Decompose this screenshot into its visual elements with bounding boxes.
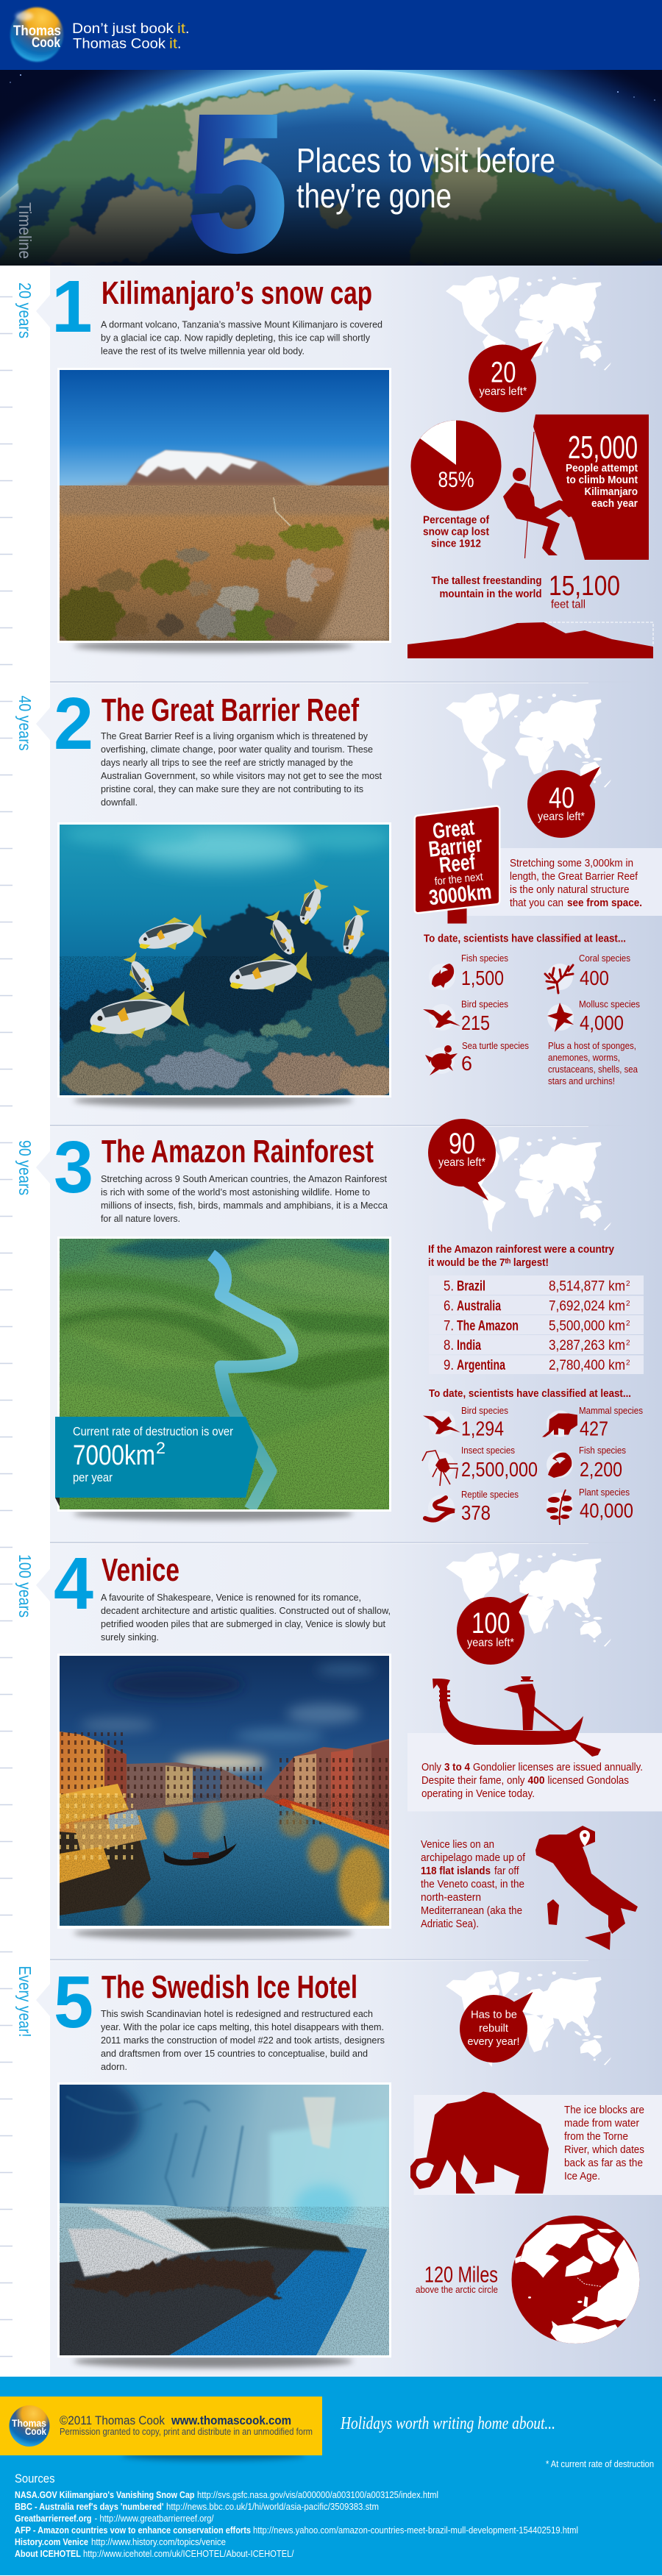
country size comparison table: it would be the 7ᵗʰ largest! [428, 1257, 549, 1269]
plant count [547, 1487, 633, 1525]
sources: NASA.GOV Kilimangiaro's Vanishing Snow Cap [15, 2490, 195, 2500]
tagline: it [169, 35, 178, 51]
callout band: gondolier licenses: licensed Gondolas [547, 1774, 629, 1787]
callout: rate of destruction: 7000km [73, 1440, 155, 1471]
copyright bar [0, 2397, 322, 2455]
body text [101, 730, 382, 808]
heading: The Great Barrier Reef [102, 692, 359, 728]
pie chart: 85%: Percentage of [423, 515, 489, 527]
callout band: mammoth: from the Torne [564, 2130, 628, 2143]
heading: Venice [102, 1552, 179, 1588]
callout band: mammoth: The ice blocks are [564, 2104, 644, 2116]
species counts: rainforest: To date, scientists have classified at least... [429, 1387, 631, 1400]
body text: for all nature lovers. [101, 1213, 180, 1224]
heading: Kilimanjaro’s snow cap [102, 275, 372, 311]
reptile count: 378 [461, 1501, 491, 1524]
big number five: 5 [188, 74, 288, 291]
reflections [122, 1801, 405, 1932]
insect count: Insect species [461, 1445, 515, 1456]
climber stat: Kilimanjaro [584, 486, 638, 498]
map with 20 years left bubble [446, 275, 611, 412]
species counts: reef [423, 933, 640, 1086]
road sign: Great Barrier Reef: Barrier [427, 832, 483, 862]
road sign: Great Barrier Reef: Reef [438, 850, 477, 878]
pie chart: 85% [410, 421, 502, 550]
body text: A favourite of Shakespeare, Venice is renowned for its romance, [101, 1592, 361, 1603]
height stat and mountain silhouette: 15,100 [549, 571, 620, 602]
height stat and mountain silhouette: mountain in the world [440, 588, 541, 600]
mammal count: 427 [580, 1417, 608, 1440]
callout band: mammoth: back as far as the [564, 2157, 643, 2169]
bird count: 215 [461, 1011, 490, 1034]
callout: rate of destruction: 2 [156, 1439, 166, 1457]
reptile count [425, 1489, 519, 1524]
map with rebuilt bubble [446, 1970, 611, 2067]
species counts: reef: To date, scientists have classified at least... [424, 933, 626, 945]
table rows: 5. [444, 1278, 454, 1295]
text: archipelago note: archipelago made up of [421, 1851, 526, 1864]
map with 90 years left bubble: 90 [449, 1128, 475, 1160]
map with rebuilt bubble: rebuilt [479, 2022, 509, 2035]
note: other species: Plus a host of sponges, [548, 1040, 636, 1051]
tagline: Thomas Cook [73, 35, 166, 51]
insect count: 2,500,000 [461, 1458, 538, 1481]
callout band: gondolier licenses: 3 to 4 [444, 1761, 471, 1773]
arctic globe and distance [416, 2216, 647, 2346]
country size comparison table [428, 1244, 644, 1374]
table rows: Argentina [457, 1358, 505, 1373]
callout band: 3,000km: length, the Great Barrier Reef [510, 871, 638, 883]
fish [138, 914, 207, 950]
sources: - http://www.greatbarrierreef.org/ [94, 2513, 214, 2524]
callout band: mammoth: made from water [564, 2117, 639, 2130]
fish count: Fish species [461, 953, 508, 964]
body text: A dormant volcano, Tanzania’s massive Mount Kilimanjaro is covered [101, 319, 382, 330]
text: archipelago note: 118 flat islands [421, 1865, 491, 1877]
logo: Thomas Cook globe: Thomas [13, 24, 61, 39]
script slogan: Holidays worth writing home about... [340, 2414, 555, 2433]
number 1: 1 [51, 266, 93, 348]
table rows: Australia [457, 1299, 501, 1314]
callout band: 3,000km [467, 848, 662, 916]
note: other species: crustaceans, shells, sea [548, 1064, 638, 1075]
note: other species: anemones, worms, [548, 1052, 620, 1063]
road sign: Great Barrier Reef [418, 809, 496, 924]
tagline: . [185, 21, 189, 37]
bed and furs [60, 2203, 389, 2355]
climber stat [503, 415, 649, 560]
body text: adorn. [101, 2061, 127, 2072]
Italy map and archipelago note [421, 1826, 638, 1950]
table rows: 2,780,400 km [549, 1358, 625, 1373]
shadow under copyright bar [121, 2450, 305, 2461]
panel: Swedish Ice Hotel [15, 1961, 662, 2368]
title [296, 141, 555, 215]
callout band: gondolier licenses: Gondolier licenses are issued annually. [473, 1761, 643, 1773]
callout: rate of destruction [55, 1417, 258, 1506]
body text: downfall. [101, 797, 138, 808]
table rows: 6. [444, 1299, 454, 1314]
callout band: 3,000km: that you can [510, 897, 563, 909]
logo: Thomas Cook globe small: Thomas [12, 2417, 46, 2429]
text: archipelago note: north-eastern [421, 1891, 481, 1904]
bird count [423, 1405, 508, 1440]
left docks [60, 1832, 151, 1915]
sources: Sources [15, 2472, 54, 2486]
logo: Thomas Cook globe small [9, 2405, 50, 2447]
fish count: 2,200 [580, 1458, 622, 1481]
arctic globe and distance: above the arctic circle [416, 2284, 498, 2295]
mammal count [542, 1405, 643, 1440]
body text: Stretching across 9 South American countries, the Amazon Rainforest [101, 1173, 387, 1184]
timeline ruler [0, 295, 50, 2357]
copyright bar: www.thomascook.com [171, 2413, 291, 2427]
pie chart: 85%: 85% [438, 468, 474, 492]
body text: The Great Barrier Reef is a living organism which is threatened by [101, 730, 368, 741]
shrubs and rocks [53, 518, 391, 646]
callout band: 3,000km: Stretching some 3,000km in [510, 858, 633, 869]
text: archipelago note: Mediterranean (aka the [421, 1904, 522, 1917]
body text: surely sinking. [101, 1632, 159, 1643]
timeline label: Timeline [15, 202, 35, 259]
title: Places to visit before [296, 141, 555, 179]
land masses [0, 85, 662, 266]
insect count [422, 1445, 538, 1486]
map with 100 years left bubble: years left* [467, 1637, 514, 1649]
map with 40 years left bubble [446, 692, 611, 838]
body text: pristine coral, they can make sure they are not contributing to its [101, 783, 363, 794]
mollusc count [547, 999, 640, 1034]
map with 20 years left bubble: 20 [491, 356, 516, 388]
sources: http://svs.gsfc.nasa.gov/vis/a000000/a003100/a003125/index.html [197, 2490, 438, 2500]
sources: About ICEHOTEL [15, 2549, 81, 2559]
table rows [444, 1278, 630, 1373]
table rows: 7. [444, 1318, 454, 1334]
callout band: 3,000km: is the only natural structure [510, 884, 630, 896]
fish count: 1,500 [461, 967, 504, 989]
gondola [163, 1843, 237, 1865]
text: archipelago note: far off [494, 1865, 519, 1877]
body text: This swish Scandinavian hotel is redesigned and restructured each [101, 2008, 373, 2019]
body text: days nearly all trips to see the reef are strictly managed by the [101, 757, 353, 768]
callout band: gondolier licenses: operating in Venice today. [421, 1787, 535, 1800]
map with 90 years left bubble: years left* [438, 1156, 485, 1169]
photo: Grand Canal at dusk [57, 1654, 405, 1940]
chandelier [303, 2097, 335, 2149]
table rows: 3,287,263 km [549, 1338, 625, 1353]
sea turtle count: Sea turtle species [462, 1040, 529, 1051]
footer [0, 2377, 662, 2575]
fish count [548, 1445, 626, 1481]
sources: http://www.history.com/topics/venice [91, 2537, 226, 2547]
climber stat: People attempt [566, 463, 638, 474]
photo: coral reef and fish [57, 822, 397, 1107]
icon: woolly mammoth [410, 2092, 549, 2193]
sources: http://www.icehotel.com/uk/ICEHOTEL/About-ICEHOTEL/ [83, 2549, 294, 2559]
timeline marker: 40 years: 40 years [15, 696, 35, 750]
text: archipelago note: Adriatic Sea). [421, 1918, 479, 1930]
map with 90 years left bubble [428, 1119, 611, 1232]
body text: leave the rest of its twelve millennia year old body. [101, 346, 305, 356]
body text: millions of insects, fish, birds, mammals and amphibians, it is a Mecca [101, 1200, 388, 1211]
logo: Thomas Cook globe: Cook [32, 35, 60, 51]
road sign: Great Barrier Reef: for the next [434, 870, 484, 888]
callout band: mammoth [410, 2092, 662, 2195]
body text [101, 2008, 385, 2072]
right buildings [262, 1739, 390, 1849]
height stat and mountain silhouette: The tallest freestanding [431, 575, 541, 587]
number 3: 3 [54, 1126, 93, 1209]
callout band: gondolier licenses: Despite their fame, only [421, 1774, 525, 1787]
map with 100 years left bubble [446, 1551, 611, 1665]
fish count [432, 953, 508, 989]
heading: The Swedish Ice Hotel [102, 1969, 357, 2005]
table rows: 2 [626, 1359, 630, 1367]
sources: http://news.yahoo.com/amazon-countries-meet-brazil-mull-development-154402519.html [253, 2525, 578, 2536]
mammal count: Mammal species [579, 1405, 643, 1416]
callout band: gondolier licenses [407, 1676, 662, 1811]
bird count: Bird species [461, 999, 508, 1009]
heading: The Amazon Rainforest [102, 1134, 374, 1170]
sources: Greatbarrierreef.org [15, 2513, 91, 2524]
height stat and mountain silhouette: feet tall [551, 599, 586, 611]
panel: Venice [15, 1543, 662, 1950]
bird count: Bird species [461, 1405, 508, 1416]
table rows: India [457, 1338, 481, 1353]
coral count: Coral species [579, 953, 630, 964]
timeline marker: 100 years: 100 years [15, 1554, 35, 1618]
panel: Kilimanjaro [15, 266, 653, 658]
map with 100 years left bubble: 100 [471, 1607, 510, 1640]
sources [15, 2472, 578, 2559]
icon: map of Italy [535, 1826, 638, 1950]
tagline [72, 21, 189, 51]
species counts: rainforest [422, 1387, 643, 1525]
road sign: Great Barrier Reef: Great [431, 815, 476, 844]
callout: rate of destruction: Current rate of destruction is over [73, 1425, 233, 1439]
body text [101, 1173, 388, 1224]
callout band: 3,000km: see from space. [567, 897, 642, 909]
table rows: 8. [444, 1338, 454, 1353]
photo: Mount Kilimanjaro [53, 368, 391, 652]
icon: gondola and gondolier [433, 1676, 601, 1757]
body text: and draftsmen from over 15 countries to conceptualise, build and [101, 2048, 368, 2059]
photo: rainforest river [57, 1237, 391, 1520]
logo: Thomas Cook globe small: Cook [25, 2425, 46, 2437]
callout: rate of destruction: per year [73, 1470, 113, 1484]
tagline: it [177, 21, 186, 37]
table rows: 7,692,024 km [549, 1299, 625, 1314]
title: they’re gone [296, 177, 452, 215]
map with rebuilt bubble: every year! [468, 2035, 519, 2048]
body text: 2011 marks the construction of model #22 and took artists, designers [101, 2035, 385, 2046]
country size comparison table: If the Amazon rainforest were a country [428, 1244, 614, 1256]
wall carvings [66, 2096, 243, 2214]
table rows: 2 [626, 1339, 630, 1348]
body text [101, 319, 382, 356]
body text: decadent architecture and artistic qualities. Constructed out of shallow, [101, 1605, 391, 1616]
callout band: gondolier licenses: 400 [528, 1774, 544, 1787]
body text: Australian Government, so while visitors may not get to see the most [101, 770, 382, 781]
sources: BBC - Australia reef's days 'numbered' [15, 2502, 164, 2512]
bird count: 1,294 [461, 1417, 504, 1440]
climber stat: to climb Mount [566, 474, 638, 486]
body text: year. With the polar ice caps melting, this hotel disappears with them. [101, 2021, 384, 2032]
note: other species: stars and urchins! [548, 1075, 615, 1086]
text: archipelago note: the Veneto coast, in the [421, 1878, 524, 1890]
map with 40 years left bubble: 40 [549, 782, 574, 814]
sources: AFP - Amazon countries vow to enhance conservation efforts [15, 2525, 251, 2536]
text: archipelago note [421, 1838, 526, 1930]
road sign: Great Barrier Reef: 3000km [427, 880, 493, 910]
pie chart: 85%: since 1912 [431, 538, 481, 550]
table rows: 2 [626, 1320, 630, 1328]
bird count [423, 999, 508, 1034]
sources: http://news.bbc.co.uk/1/hi/world/asia-pacific/3509383.stm [166, 2502, 379, 2512]
sources: History.com Venice [15, 2537, 88, 2547]
number 2: 2 [54, 683, 93, 765]
table rows: 8,514,877 km [549, 1278, 625, 1295]
mollusc count: Mollusc species [579, 999, 640, 1009]
timeline marker: 20 years: 20 years [15, 282, 35, 338]
tagline: Don’t just book [72, 21, 174, 37]
map with rebuilt bubble: Has to be [471, 2008, 517, 2021]
mollusc count: 4,000 [580, 1011, 624, 1034]
hero banner: earth from space [0, 70, 662, 266]
callout band: mammoth: Ice Age. [564, 2170, 600, 2182]
fish count: Fish species [579, 1445, 626, 1456]
climber stat: each year [591, 498, 638, 510]
sea turtle count [425, 1040, 529, 1075]
body text: overfishing, climate change, poor water quality and tourism. These [101, 744, 373, 755]
tagline: . [177, 35, 181, 51]
table rows: 5,500,000 km [549, 1318, 625, 1334]
sea turtle count: 6 [461, 1052, 472, 1075]
plant count: 40,000 [580, 1499, 633, 1522]
body text: petrified wooden piles that are submerged in clay, Venice is slowly but [101, 1618, 385, 1629]
copyright bar: Permission granted to copy, print and distribute in an unmodified form [60, 2427, 313, 2437]
table rows: 2 [626, 1300, 630, 1308]
number 5: 5 [54, 1961, 93, 2043]
map with 20 years left bubble: years left* [480, 385, 527, 398]
panel: Great Barrier Reef [15, 683, 662, 1107]
body text: by a glacial ice cap. Now rapidly depleting, this ice cap will shortly [101, 332, 370, 343]
header bar [0, 0, 662, 70]
panel: Amazon Rainforest [15, 1119, 644, 1525]
coral count [545, 953, 630, 993]
table rows: Brazil [457, 1278, 485, 1295]
table rows: 9. [444, 1358, 454, 1373]
text: archipelago note: Venice lies on an [421, 1838, 494, 1851]
body text: is rich with some of the world’s most astonishing wildlife. Home to [101, 1186, 370, 1198]
stars [10, 74, 655, 101]
map with 40 years left bubble: years left* [538, 811, 585, 823]
globe land [515, 2224, 647, 2346]
height stat and mountain silhouette [407, 571, 653, 658]
plant count: Plant species [579, 1487, 630, 1498]
arctic globe and distance: 120 Miles [424, 2261, 498, 2288]
table rows: 2 [626, 1280, 630, 1288]
copyright bar: ©2011 Thomas Cook [60, 2413, 165, 2427]
logo: Thomas Cook globe [10, 7, 63, 62]
number 4: 4 [54, 1543, 93, 1625]
photo: ice hotel bedroom [22, 2074, 391, 2368]
timeline marker: 90 years: 90 years [15, 1140, 35, 1195]
left buildings [60, 1732, 266, 1883]
callout band: mammoth: River, which dates [564, 2143, 644, 2156]
timeline marker: Every year: Every year! [15, 1965, 35, 2038]
note: other species [548, 1040, 638, 1086]
coral count: 400 [580, 967, 609, 989]
reptile count: Reptile species [461, 1489, 519, 1500]
body text [101, 1592, 391, 1643]
pie chart: 85%: snow cap lost [423, 527, 489, 538]
table rows: The Amazon [457, 1318, 519, 1334]
callout band: gondolier licenses: Only [421, 1761, 441, 1773]
